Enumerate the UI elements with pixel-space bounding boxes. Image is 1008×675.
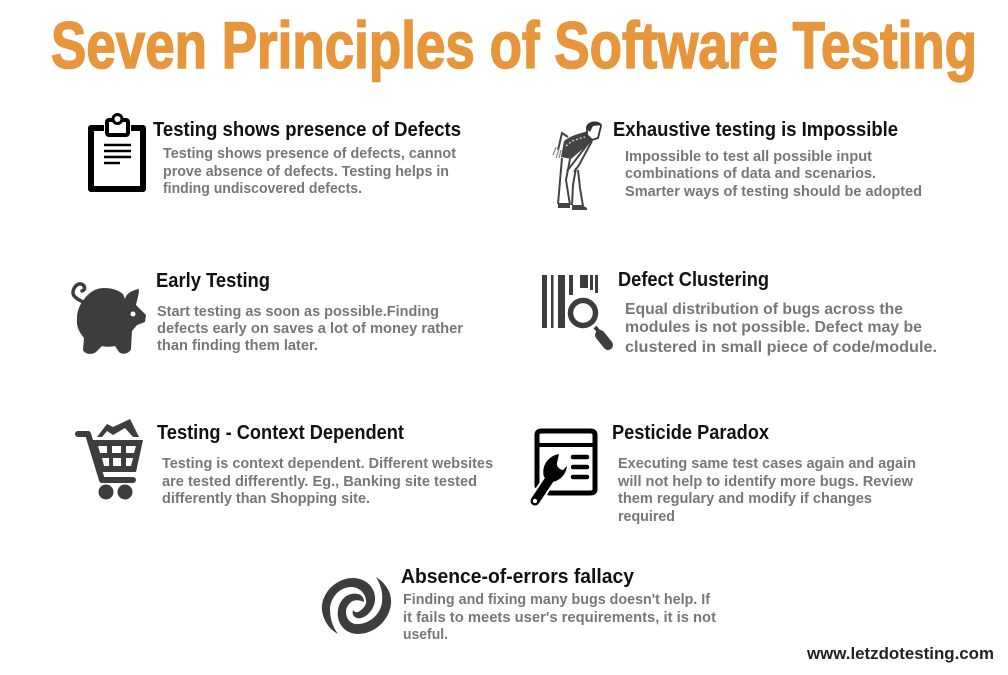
panel: absence of errors fallacy (322, 566, 716, 643)
description: Equal distribution of bugs across the (625, 301, 903, 318)
website credit: www.letzdotesting.com (806, 644, 994, 663)
heading: Defect Clustering (618, 269, 769, 291)
icon: man bending over (553, 122, 602, 210)
description (625, 148, 922, 200)
panel: exhaustive testing is impossible (553, 119, 922, 210)
description (625, 301, 937, 356)
description: Testing is context dependent. Different websites (162, 455, 493, 472)
description: Finding and fixing many bugs doesn't help. If (403, 591, 711, 608)
description: defects early on saves a lot of money rather (157, 320, 463, 337)
description: Testing shows presence of defects, cannot (163, 145, 456, 162)
heading: Early Testing (156, 270, 270, 292)
icon: barcode with magnifier (542, 275, 608, 345)
description: combinations of data and scenarios. (625, 165, 876, 182)
description: required (618, 508, 675, 525)
panel: early testing (73, 270, 463, 354)
description: Impossible to test all possible input (625, 148, 872, 165)
description (403, 591, 716, 643)
description: will not help to identify more bugs. Review (617, 473, 913, 490)
description: Start testing as soon as possible.Finding (157, 303, 439, 320)
description (162, 455, 493, 507)
icon: window with wrench (533, 431, 595, 503)
heading: Absence-of-errors fallacy (401, 566, 635, 588)
heading: Pesticide Paradox (612, 422, 769, 444)
description: clustered in small piece of code/module. (625, 339, 937, 356)
description: prove absence of defects. Testing helps in (163, 163, 449, 180)
description: it fails to meets user's requirements, it is not (403, 609, 716, 626)
description: differently than Shopping site. (162, 490, 370, 507)
panel: testing context dependent (78, 419, 493, 507)
description (163, 145, 456, 197)
heading: Exhaustive testing is Impossible (613, 119, 898, 141)
description: useful. (403, 626, 448, 643)
description: them regulary and modify if changes (618, 490, 872, 507)
description: Executing same test cases again and again (618, 455, 916, 472)
icon: spiral (322, 577, 391, 634)
heading: Testing shows presence of Defects (153, 119, 461, 141)
panel: pesticide paradox (533, 422, 916, 525)
description: modules is not possible. Defect may be (625, 319, 922, 336)
description (617, 455, 916, 525)
icon: piggy bank (73, 284, 146, 354)
description: are tested differently. Eg., Banking site tested (162, 473, 477, 490)
description: finding undiscovered defects. (163, 180, 362, 197)
panel: defect clustering (542, 269, 937, 356)
description (157, 303, 463, 354)
icon: clipboard (91, 114, 143, 189)
icon: shopping cart (78, 419, 143, 500)
heading: Testing - Context Dependent (157, 422, 404, 444)
description: than finding them later. (157, 337, 318, 354)
description: Smarter ways of testing should be adopted (625, 183, 922, 200)
panel: testing shows presence of defects (91, 114, 461, 197)
